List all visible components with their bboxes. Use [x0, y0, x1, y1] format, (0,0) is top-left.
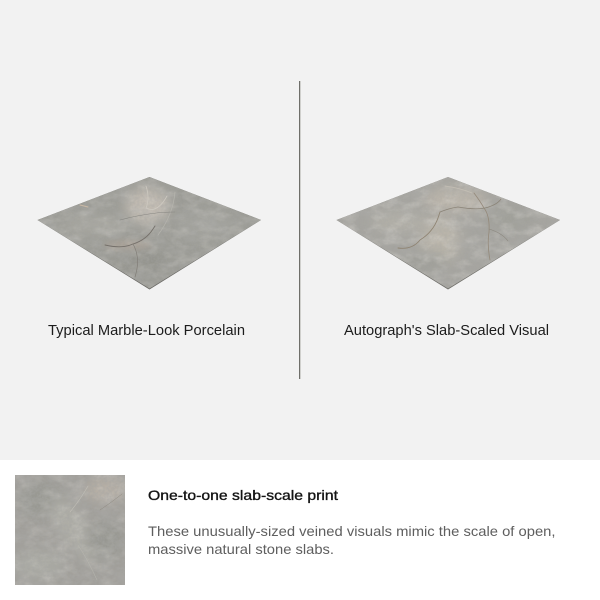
description text: These unusually-sized veined visuals mimic the scale of open, — [148, 523, 556, 539]
heading: One-to-one slab-scale print — [148, 487, 338, 503]
tile: autograph's slab-scaled visual — [336, 177, 560, 290]
description text: massive natural stone slabs. — [148, 541, 334, 557]
panel: comparison — [0, 0, 600, 460]
label: typical marble-look porcelain: Typical Marble-Look Porcelain — [48, 323, 245, 339]
tile: typical marble-look porcelain — [38, 177, 261, 290]
description text — [148, 523, 556, 557]
swatch: slab texture — [15, 475, 125, 585]
panel: feature description — [15, 475, 556, 585]
divider line — [299, 81, 301, 379]
label: autograph's slab-scaled visual: Autograph's Slab-Scaled Visual — [344, 323, 549, 339]
